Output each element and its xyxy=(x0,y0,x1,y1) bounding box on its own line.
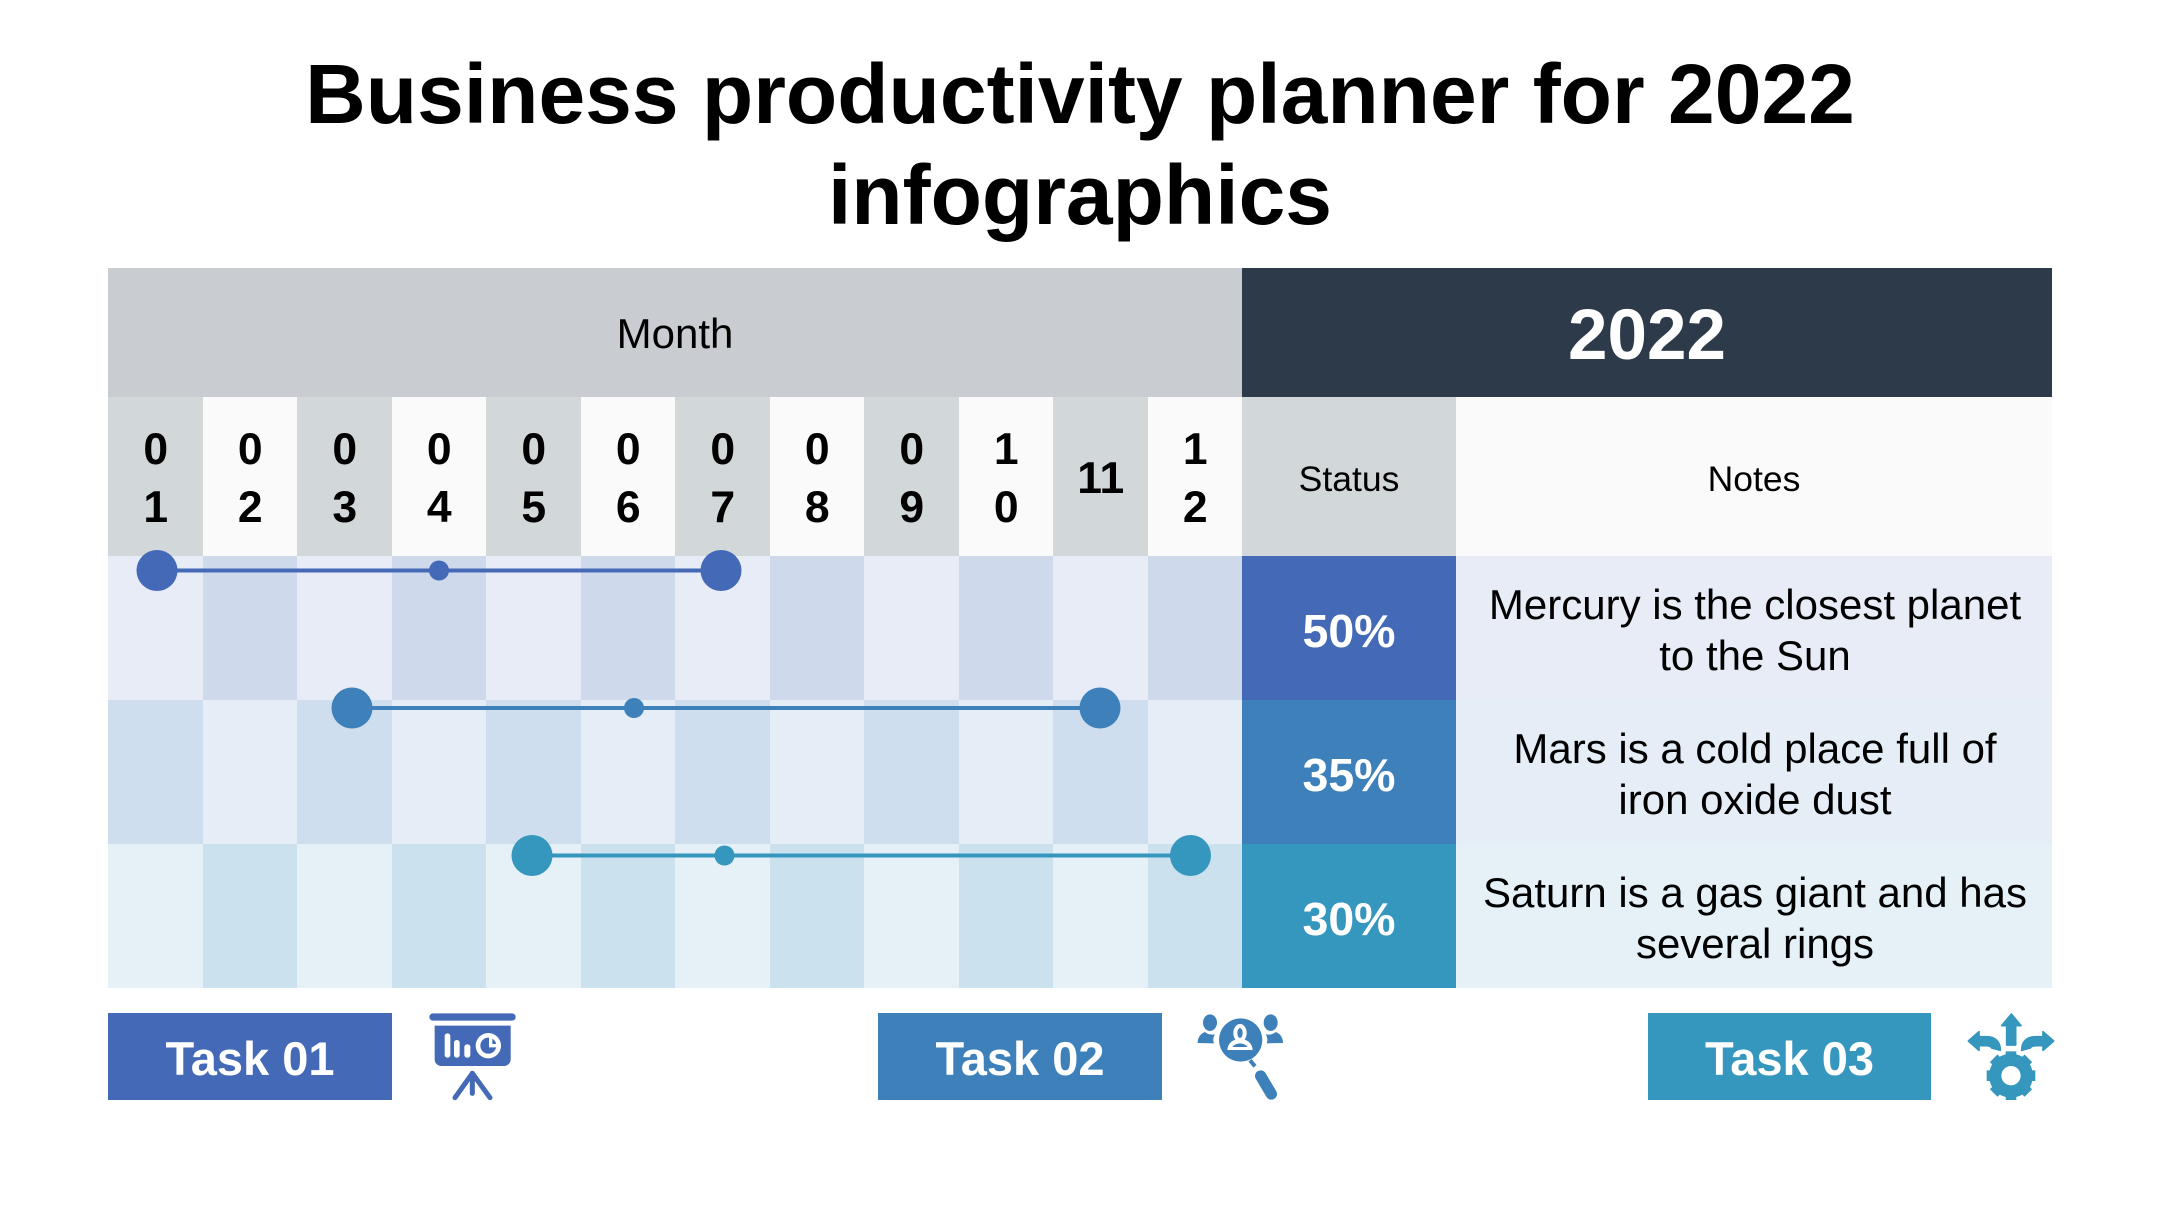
month number columns: 8 xyxy=(805,483,830,532)
month number columns: 0 xyxy=(710,425,735,474)
title: Business productivity planner for 2022 xyxy=(305,47,1855,141)
title xyxy=(305,47,1855,242)
month number columns: 0 xyxy=(332,425,357,474)
year header band: 2022 xyxy=(1568,296,1726,374)
status 35%: 35% xyxy=(1302,748,1396,800)
note: Saturn: Saturn is a gas giant and has xyxy=(1483,868,2027,916)
month number columns: 4 xyxy=(427,483,452,532)
month number columns: 11 xyxy=(1077,454,1124,503)
icon: people search xyxy=(1198,1014,1283,1100)
note: Saturn: several rings xyxy=(1636,920,1874,966)
icon: gear with arrows xyxy=(1968,1013,2054,1100)
month number columns: 7 xyxy=(710,483,735,532)
month number columns xyxy=(108,397,1208,556)
month number columns: 0 xyxy=(143,425,168,474)
note: Mercury xyxy=(1456,556,2052,700)
month number columns: 3 xyxy=(332,483,357,532)
task 01 label: Task 01 xyxy=(166,1032,334,1084)
month number columns: 1 xyxy=(1183,425,1208,474)
task 03 label: Task 03 xyxy=(1705,1032,1874,1084)
month number columns: 0 xyxy=(427,425,452,474)
month number columns: 5 xyxy=(521,483,546,532)
month number columns: 0 xyxy=(805,425,830,474)
status 50% xyxy=(1242,556,1456,700)
month number columns: 2 xyxy=(238,483,263,532)
note: Mars: iron oxide dust xyxy=(1618,776,1892,822)
note: Mercury: Mercury is the closest planet xyxy=(1489,580,2021,628)
task 2 checker row xyxy=(108,700,1242,844)
month number columns: 2 xyxy=(1183,483,1208,532)
notes column heading: Notes xyxy=(1708,458,1800,498)
year header band xyxy=(1242,268,2052,397)
month number columns: 0 xyxy=(994,483,1019,532)
notes column heading xyxy=(1456,397,2052,556)
month header band xyxy=(108,268,1242,397)
task 1 checker row xyxy=(108,556,1242,700)
month number columns: 0 xyxy=(616,425,641,474)
status 30% xyxy=(1242,844,1456,988)
month number columns: 1 xyxy=(994,425,1019,474)
task 01 label xyxy=(108,1013,392,1100)
month header band: Month xyxy=(617,310,733,357)
note: Mars xyxy=(1456,700,2052,844)
status 35% xyxy=(1242,700,1456,844)
task 02 label: Task 02 xyxy=(936,1032,1104,1084)
icon: presentation board xyxy=(429,1013,516,1100)
note: Mars: Mars is a cold place full of xyxy=(1513,724,1997,772)
status column heading: Status xyxy=(1299,458,1399,498)
note: Mercury: to the Sun xyxy=(1659,632,1851,678)
task 3 checker row xyxy=(108,844,1242,988)
month number columns: 0 xyxy=(521,425,546,474)
status 50%: 50% xyxy=(1302,604,1396,656)
status column heading xyxy=(1242,397,1456,556)
task 02 label xyxy=(878,1013,1162,1100)
title: infographics xyxy=(828,148,1332,242)
status 30%: 30% xyxy=(1302,892,1396,944)
month number columns: 9 xyxy=(899,483,924,532)
note: Saturn xyxy=(1456,844,2052,988)
month number columns: 0 xyxy=(899,425,924,474)
month number columns: 6 xyxy=(616,483,641,532)
month number columns: 1 xyxy=(143,483,168,532)
month number columns: 0 xyxy=(238,425,263,474)
task 03 label xyxy=(1648,1013,1931,1100)
